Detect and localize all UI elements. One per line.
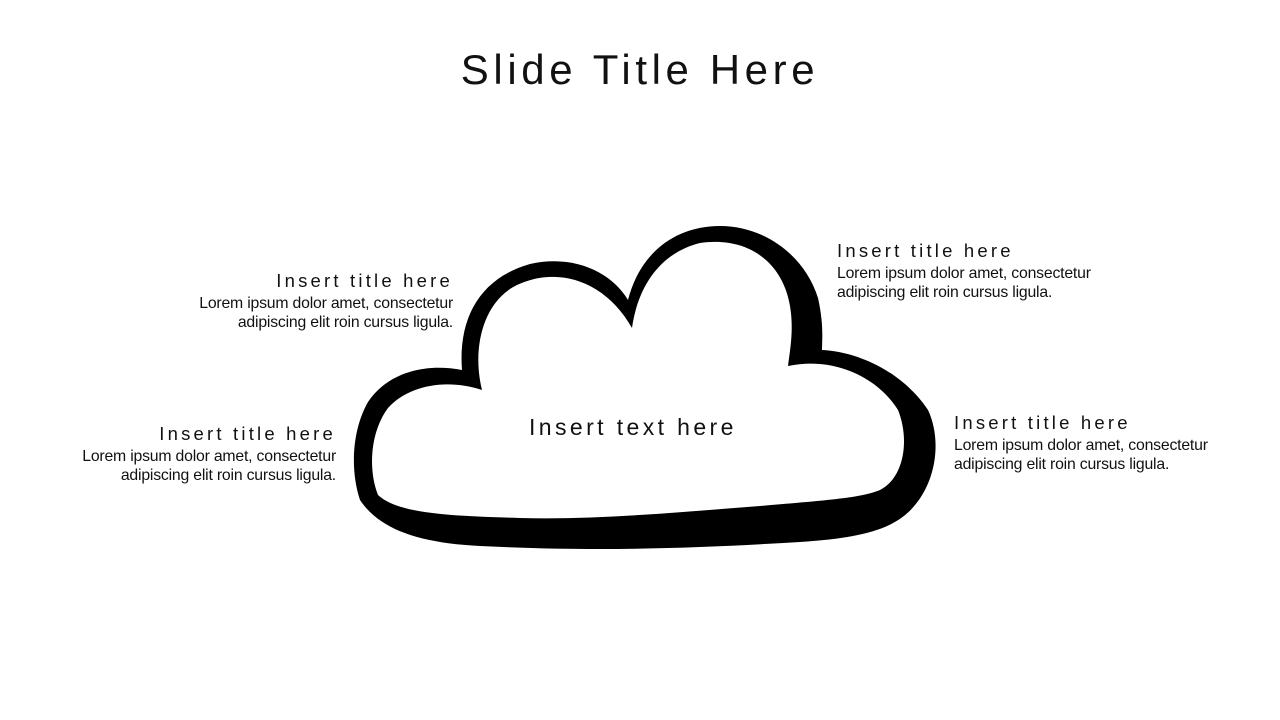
- item: top right: [837, 240, 1091, 301]
- item: bottom left: [82, 423, 336, 484]
- item: top right: Insert title here: [837, 240, 1014, 261]
- item: top left: [199, 270, 453, 331]
- item: top left: adipiscing elit roin cursus ligula.: [238, 314, 453, 331]
- title: Slide Title Here: [461, 46, 819, 93]
- item: bottom right: Insert title here: [954, 412, 1131, 433]
- item: top right: adipiscing elit roin cursus ligula.: [837, 284, 1052, 301]
- item: top left: Lorem ipsum dolor amet, consectetur: [199, 295, 453, 312]
- item: bottom left: adipiscing elit roin cursus ligula.: [121, 467, 336, 484]
- item: bottom left: Lorem ipsum dolor amet, consectetur: [82, 448, 336, 465]
- item: bottom left: Insert title here: [159, 423, 336, 444]
- item: bottom right: Lorem ipsum dolor amet, consectetur: [954, 437, 1208, 454]
- item: top right: Lorem ipsum dolor amet, consectetur: [837, 265, 1091, 282]
- item: bottom right: adipiscing elit roin cursus ligula.: [954, 456, 1169, 473]
- item: top left: Insert title here: [276, 270, 453, 291]
- item: bottom right: [954, 412, 1208, 473]
- center text: Insert text here: [529, 414, 737, 440]
